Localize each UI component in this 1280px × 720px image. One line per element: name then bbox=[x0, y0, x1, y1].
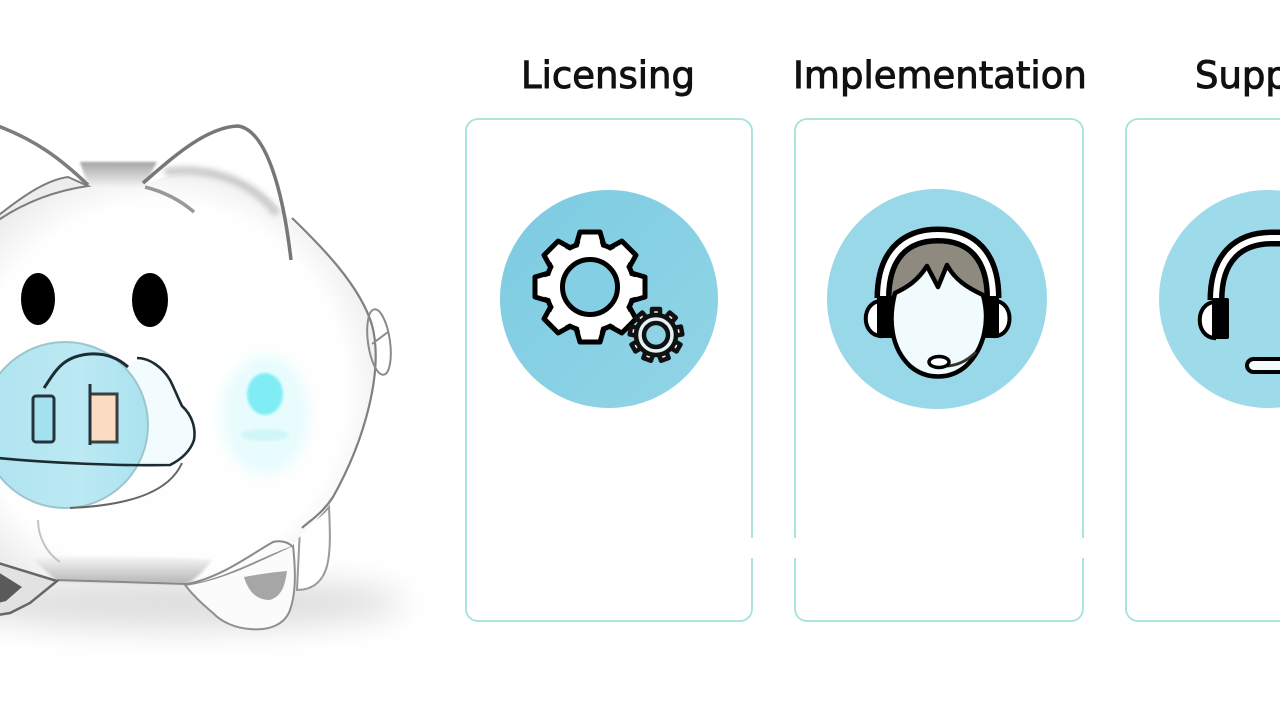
pig foot reflection bbox=[244, 571, 287, 600]
piggy bank illustration bbox=[0, 126, 405, 629]
left ear cup bbox=[866, 296, 896, 338]
phone icon bbox=[33, 396, 54, 442]
cloud lobe fill bbox=[120, 360, 194, 465]
headband bbox=[1216, 238, 1280, 300]
heading: licensing: Licensing bbox=[521, 54, 695, 97]
cloud outline bbox=[44, 354, 128, 388]
icon: gears bbox=[500, 190, 718, 408]
pig left foot bbox=[0, 563, 57, 615]
pig eyes bbox=[21, 273, 168, 327]
small gear bbox=[630, 309, 682, 361]
column: implementation bbox=[793, 54, 1087, 621]
card: support bbox=[1126, 119, 1280, 621]
tablet icon bbox=[90, 394, 117, 442]
hair bbox=[890, 243, 986, 300]
column: licensing bbox=[466, 54, 752, 621]
pig inner leg curve bbox=[38, 520, 60, 562]
ear cup bbox=[1200, 298, 1229, 339]
pig forehead band bbox=[80, 162, 157, 187]
large gear bbox=[535, 232, 645, 342]
pig body bbox=[0, 162, 376, 584]
column: support bbox=[1126, 54, 1280, 621]
pig right ear bbox=[143, 126, 291, 260]
pig tail bbox=[364, 308, 394, 376]
heading: implementation: Implementation bbox=[793, 54, 1087, 97]
pig body outline right bbox=[292, 218, 376, 528]
pig front right leg bbox=[185, 545, 295, 629]
microphone bbox=[1247, 359, 1280, 372]
glowing coin spot bbox=[221, 355, 309, 475]
icon circle bbox=[1159, 190, 1280, 408]
microphone bbox=[929, 352, 976, 368]
icon circle bbox=[827, 189, 1047, 409]
card: implementation bbox=[795, 119, 1083, 621]
headband bbox=[883, 235, 993, 298]
pig rear leg bbox=[297, 507, 330, 590]
pig belly outline bbox=[57, 541, 293, 584]
pig belly shading bbox=[30, 556, 212, 584]
icon circle bbox=[500, 190, 718, 408]
face bbox=[892, 265, 986, 376]
icon: person with headset bbox=[827, 189, 1047, 409]
card: licensing bbox=[466, 119, 752, 621]
icon: headset bbox=[1159, 190, 1280, 408]
card border gaps bbox=[749, 538, 1086, 558]
right ear cup bbox=[980, 296, 1010, 338]
snout with cloud icon bbox=[0, 342, 194, 508]
pig ground shadow bbox=[0, 577, 405, 629]
pig head shading bbox=[165, 171, 277, 214]
pig left ear bbox=[0, 126, 88, 226]
